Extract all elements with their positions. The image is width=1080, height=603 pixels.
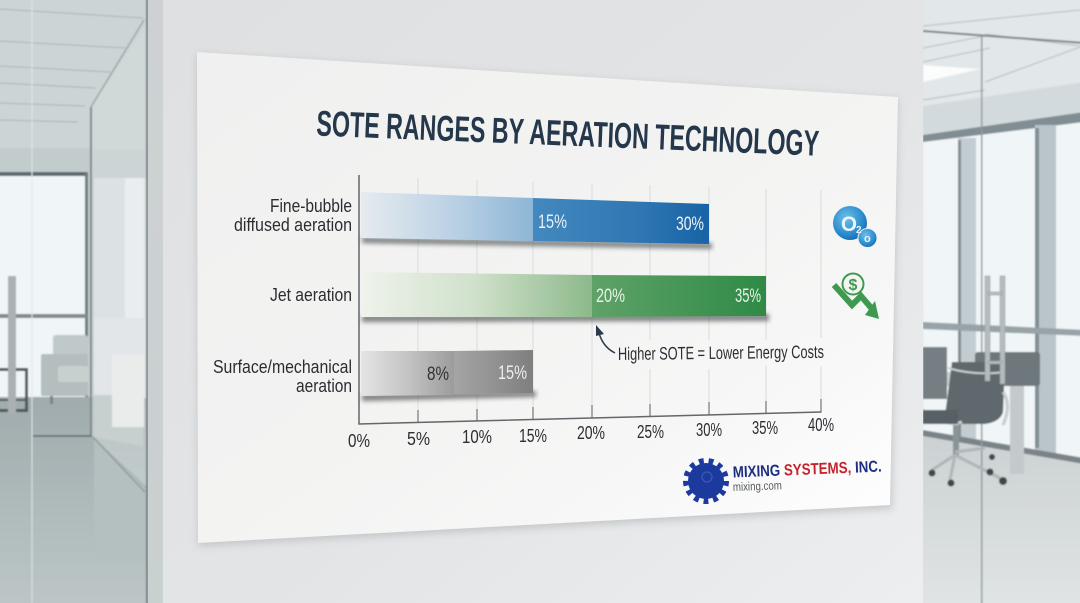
axis labels: 5% <box>407 429 430 449</box>
bar: surface/mechanical aeration: 8% <box>427 364 449 385</box>
icon: O2 bubbles: O <box>841 213 857 236</box>
bar: jet aeration <box>361 272 766 317</box>
callout arrow <box>596 325 615 353</box>
right back wall band <box>923 82 1080 138</box>
axis labels: 0% <box>348 431 370 451</box>
glass door edge <box>981 36 982 603</box>
chart: SOTE ranges <box>213 175 834 451</box>
icon: blue gear <box>686 461 726 501</box>
category labels: Fine-bubble <box>270 195 352 216</box>
left window <box>0 172 88 434</box>
scene: left glass-walled office <box>0 0 150 603</box>
scene: right glass-walled office <box>923 0 1080 603</box>
bar: jet aeration: 35% <box>735 286 761 307</box>
left floor <box>0 397 148 603</box>
axis labels <box>348 415 834 451</box>
right floor <box>923 432 1080 603</box>
left ceiling <box>0 0 148 172</box>
axis labels: 35% <box>752 418 778 438</box>
logo url: mixing.com <box>733 478 782 494</box>
skylight <box>923 65 980 82</box>
right ceiling lines <box>923 10 1080 100</box>
axis labels: 25% <box>637 422 664 442</box>
category labels: diffused aeration <box>234 214 352 235</box>
bar: surface/mechanical aeration <box>361 350 533 396</box>
armchair <box>41 335 88 404</box>
bar shadows <box>362 237 769 401</box>
wall <box>148 0 923 603</box>
bar: fine-bubble diffused aeration: 30% <box>676 214 704 235</box>
callout: higher SOTE: Higher SOTE = Lower Energy Costs <box>618 342 824 364</box>
axis labels: 30% <box>696 420 722 440</box>
bar: fine-bubble diffused aeration <box>361 192 709 244</box>
conference table <box>923 347 1040 474</box>
axis ticks <box>418 399 821 423</box>
icon: O2 bubbles <box>833 206 877 248</box>
side table <box>0 368 28 412</box>
glass frame lines <box>32 0 145 603</box>
right window frame and glazing <box>923 112 1080 460</box>
bar: surface/mechanical aeration: 15% <box>498 363 527 384</box>
icon: falling dollar arrow: $ <box>849 277 858 294</box>
bar: fine-bubble diffused aeration: 15% <box>538 212 567 233</box>
glass panel reflection <box>91 22 148 560</box>
title: SOTE RANGES BY AERATION TECHNOLOGY <box>316 103 820 164</box>
door handle <box>8 276 16 414</box>
category labels: aeration <box>296 375 352 396</box>
axis labels: 20% <box>577 423 605 443</box>
bar: jet aeration: 20% <box>596 286 625 307</box>
axis labels: 40% <box>808 415 834 435</box>
logo wordmark: MIXING SYSTEMS, INC. <box>732 459 882 481</box>
icon: O2 bubbles: 2 <box>856 225 862 236</box>
board shadow <box>197 54 898 546</box>
grid lines <box>418 178 821 423</box>
axes <box>359 175 822 424</box>
axis labels: 15% <box>519 426 547 446</box>
category labels <box>213 195 352 396</box>
axis labels: 10% <box>462 427 492 447</box>
logo: Mixing Systems, Inc. <box>686 459 882 501</box>
icon: falling dollar arrow <box>834 274 879 319</box>
office chair <box>923 362 1008 486</box>
whiteboard panel <box>197 52 898 543</box>
callout: higher SOTE <box>596 325 824 364</box>
category labels: Jet aeration <box>270 284 352 305</box>
category labels: Surface/mechanical <box>213 356 352 377</box>
icon: O2 bubbles: o <box>864 233 871 245</box>
door pull handles <box>985 276 1005 384</box>
